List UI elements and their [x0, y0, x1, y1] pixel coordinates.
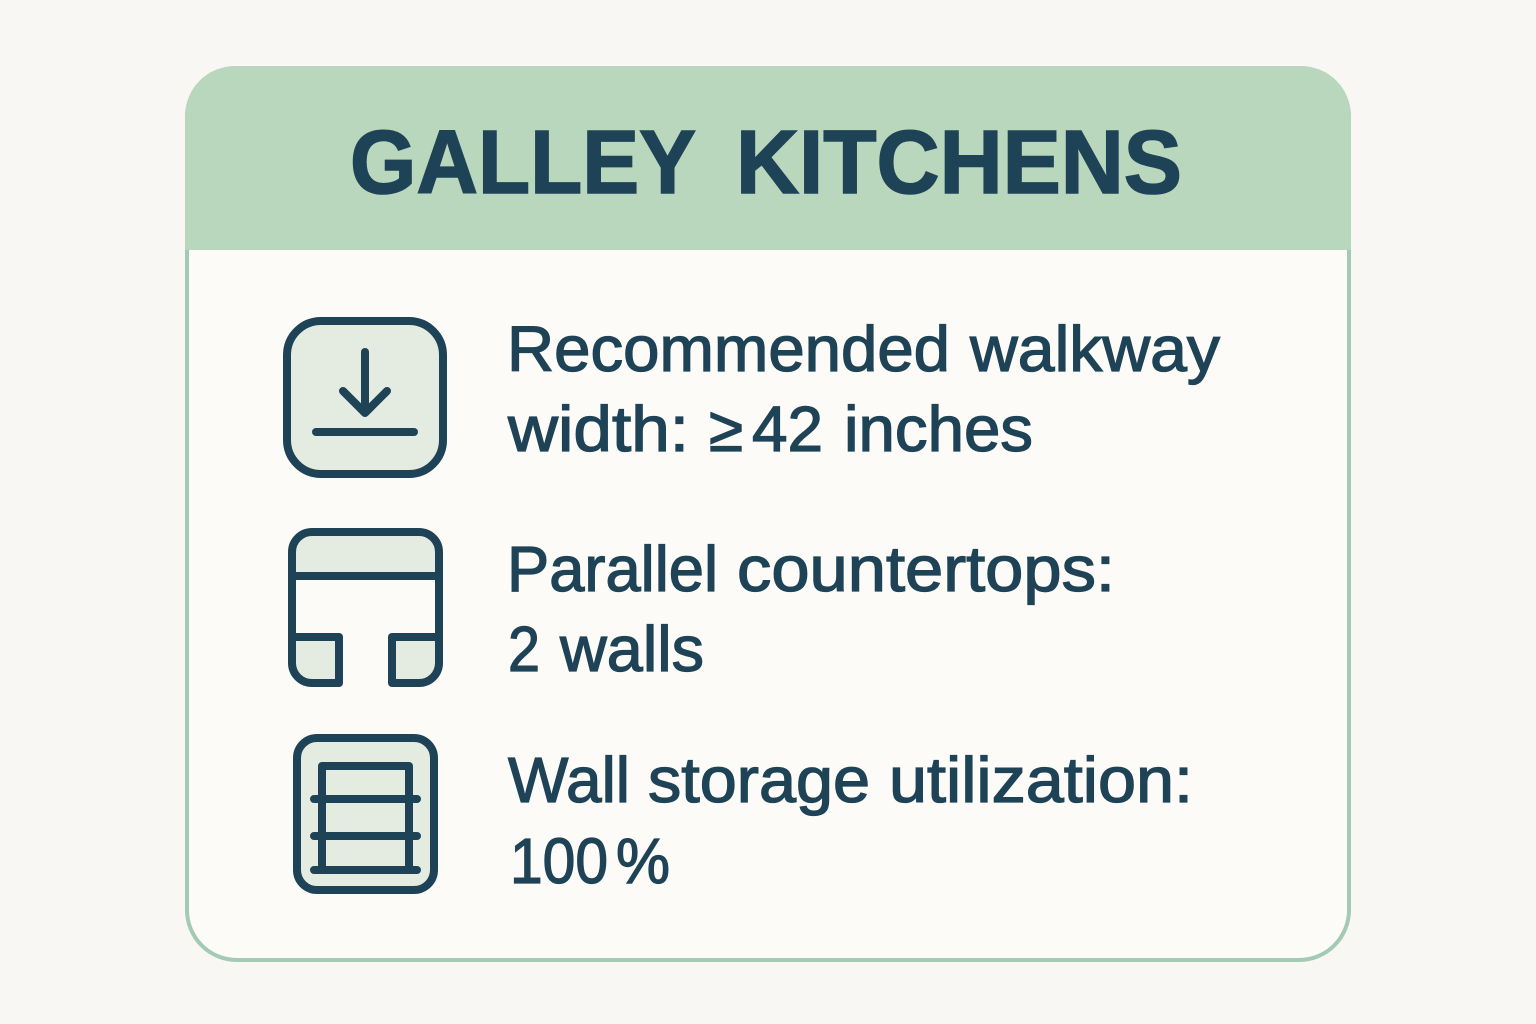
text: wall storage: %	[616, 825, 670, 897]
text: wall storage: utilization:	[889, 744, 1193, 816]
text: walkway width: width:	[507, 393, 689, 465]
text: wall storage: Wall	[508, 744, 630, 816]
text: parallel countertops: 2	[508, 613, 540, 685]
panel: galley kitchens card	[185, 66, 1351, 960]
title: GALLEY	[350, 113, 696, 213]
title	[350, 113, 1182, 213]
text: walkway width: ≥	[709, 393, 743, 465]
text: walkway width	[507, 313, 1220, 465]
text: parallel countertops: countertops:	[737, 533, 1115, 605]
icon: parallel countertops	[292, 532, 439, 683]
text: walkway width: walkway	[969, 313, 1220, 385]
icon: walkway width arrow	[287, 321, 443, 474]
icon: wall storage shelves	[297, 738, 434, 890]
title: KITCHENS	[736, 113, 1182, 213]
text: walkway width: 42	[752, 393, 823, 465]
text: walkway width: Recommended	[507, 313, 950, 385]
header band	[185, 66, 1351, 250]
text: wall storage: storage	[648, 744, 870, 816]
text: parallel countertops: walls	[559, 613, 704, 685]
text: parallel countertops: Parallel	[507, 533, 718, 605]
text: wall storage	[508, 744, 1193, 897]
text: parallel countertops	[507, 533, 1115, 685]
text: wall storage: 100	[510, 825, 608, 897]
text: walkway width: inches	[844, 393, 1033, 465]
